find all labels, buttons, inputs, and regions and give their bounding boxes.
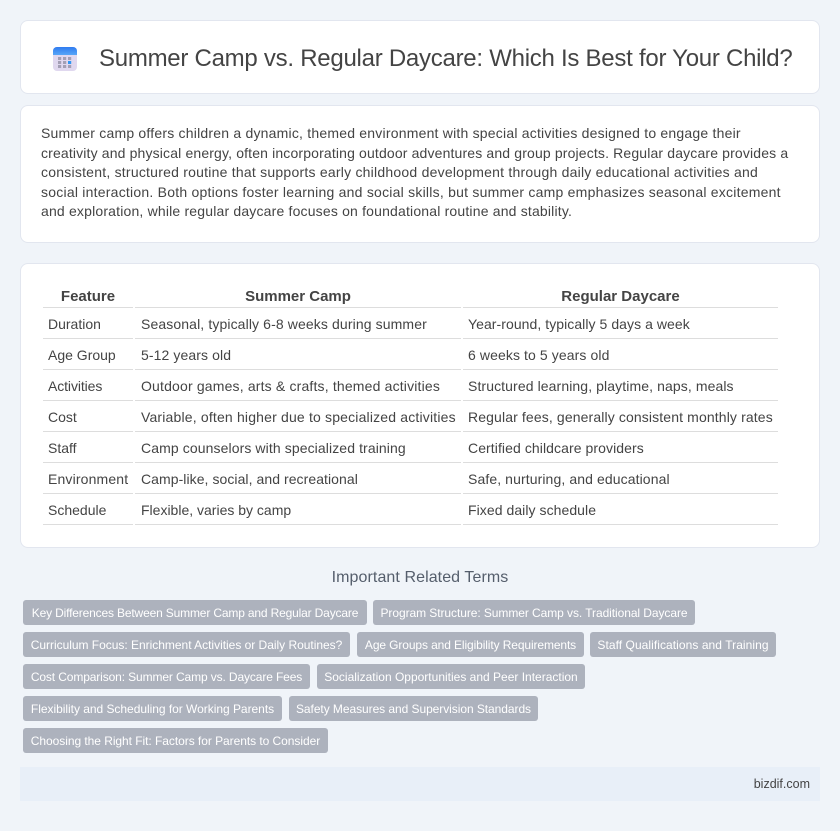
text block: introduction xyxy=(41,125,788,219)
footer bar xyxy=(20,767,820,801)
table: comparison: Summer Camp xyxy=(245,288,351,305)
text block: introduction: social interaction. Both options foster learning and social skills, but summer camp emphasizes seasonal excitement xyxy=(41,184,781,200)
table: comparison: Year-round, typically 5 days a week xyxy=(468,316,690,332)
table: comparison: Regular fees, generally consistent monthly rates xyxy=(468,409,773,425)
table: comparison: Environment xyxy=(48,471,128,487)
tag: Curriculum Focus: Enrichment Activities or Daily Routines? xyxy=(31,638,342,652)
table: comparison: Seasonal, typically 6-8 weeks during summer xyxy=(141,316,427,332)
tag xyxy=(317,664,585,689)
table: comparison: Certified childcare providers xyxy=(468,440,644,456)
tag xyxy=(23,664,310,689)
table: comparison: Fixed daily schedule xyxy=(468,502,596,518)
tag xyxy=(357,632,584,657)
tag: Age Groups and Eligibility Requirements xyxy=(365,638,576,652)
table: comparison: Staff xyxy=(48,440,77,456)
table: comparison: Safe, nurturing, and educational xyxy=(468,471,670,487)
tag: Staff Qualifications and Training xyxy=(597,638,769,652)
tag: Flexibility and Scheduling for Working Parents xyxy=(31,702,274,716)
text block: introduction: consistent, structured routine that supports early childhood development through daily educational activities and xyxy=(41,164,758,180)
table: comparison: 6 weeks to 5 years old xyxy=(468,347,610,363)
table: comparison: Age Group xyxy=(48,347,116,363)
table: comparison: Schedule xyxy=(48,502,106,518)
tag xyxy=(23,600,367,625)
table: comparison: Duration xyxy=(48,316,101,332)
text block: introduction: creativity and physical energy, often incorporating outdoor adventures and group projects. Regular daycare provides a xyxy=(41,145,788,161)
heading: related terms: Important Related Terms xyxy=(332,569,508,586)
table: comparison: Cost xyxy=(48,409,77,425)
table: comparison: Outdoor games, arts & crafts, themed activities xyxy=(141,378,440,394)
tag xyxy=(23,696,282,721)
tag list: related terms xyxy=(23,600,776,753)
tag xyxy=(23,728,328,753)
text block: introduction: Summer camp offers children a dynamic, themed environment with special activities designed to engage their xyxy=(41,125,741,141)
table: comparison xyxy=(43,288,778,525)
table: comparison: Regular Daycare xyxy=(561,288,680,305)
table: comparison: Variable, often higher due to specialized activities xyxy=(141,409,456,425)
table: comparison: 5-12 years old xyxy=(141,347,231,363)
tag: Choosing the Right Fit: Factors for Parents to Consider xyxy=(31,734,320,748)
panel: title header xyxy=(20,20,820,94)
tag: Cost Comparison: Summer Camp vs. Daycare Fees xyxy=(31,670,302,684)
panel: comparison table xyxy=(20,263,820,548)
tag: Safety Measures and Supervision Standards xyxy=(296,702,531,716)
tag xyxy=(373,600,695,625)
footer text: bizdif.com xyxy=(754,777,810,791)
table: comparison: Flexible, varies by camp xyxy=(141,502,291,518)
table: comparison: Activities xyxy=(48,378,102,394)
tag xyxy=(590,632,776,657)
tag xyxy=(289,696,538,721)
table: comparison: Camp-like, social, and recreational xyxy=(141,471,358,487)
title: Summer Camp vs. Regular Daycare: Which Is Best for Your Child? xyxy=(99,45,792,72)
panel: introduction xyxy=(20,105,820,243)
tag: Key Differences Between Summer Camp and Regular Daycare xyxy=(32,606,358,620)
table: comparison: Camp counselors with specialized training xyxy=(141,440,406,456)
icon: calendar xyxy=(53,47,77,71)
table: comparison: Structured learning, playtime, naps, meals xyxy=(468,378,734,394)
table header: Feature xyxy=(61,288,115,305)
tag: Program Structure: Summer Camp vs. Traditional Daycare xyxy=(380,606,688,620)
tag xyxy=(23,632,350,657)
tag: Socialization Opportunities and Peer Interaction xyxy=(324,670,578,684)
text block: introduction: and exploration, while regular daycare focuses on foundational routine and stability. xyxy=(41,203,572,219)
